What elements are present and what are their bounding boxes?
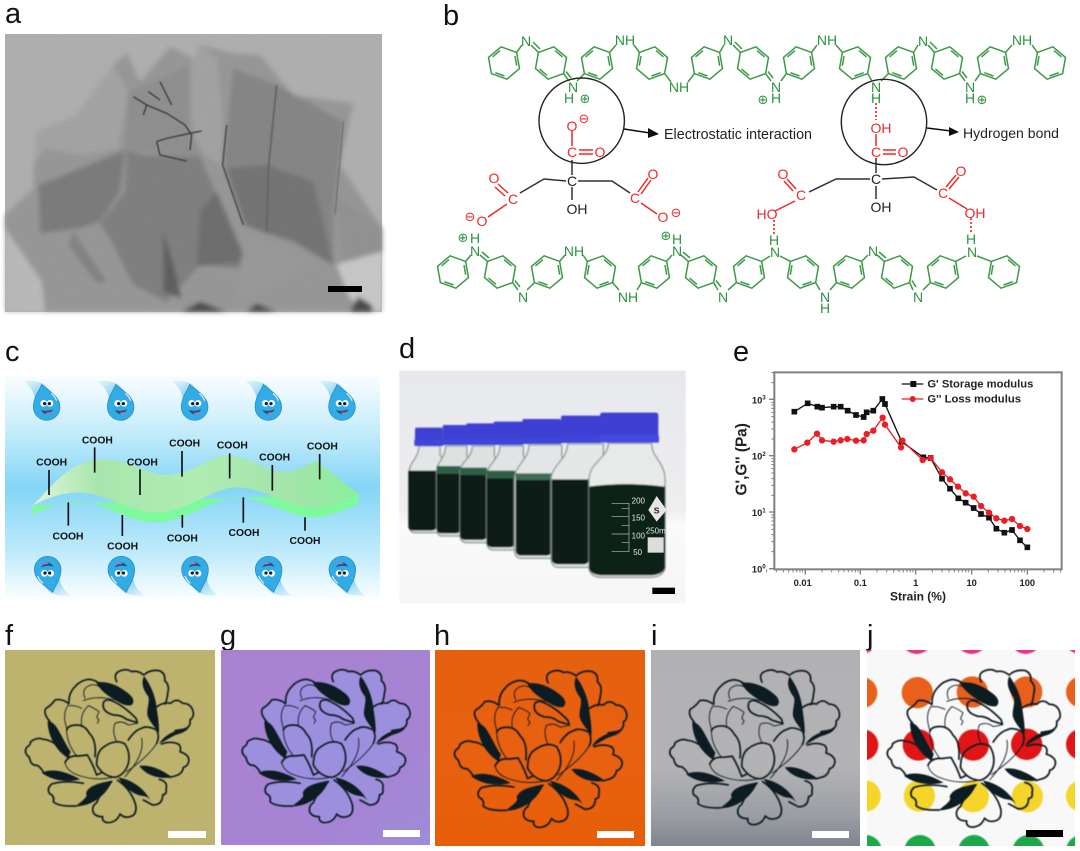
panel a: TEM micrograph of nanosheets (5, 34, 382, 312)
panel label g: g (220, 620, 236, 652)
top polyaniline chain: N (568, 79, 578, 95)
top polyaniline chain: ⊕ (758, 93, 768, 108)
panel label h: h (434, 620, 450, 652)
callout: electrostatic interaction (539, 78, 812, 163)
bottom polyaniline chain: N (770, 244, 780, 260)
x tick labels: 10 (966, 578, 977, 588)
bottle 6 (551, 416, 608, 567)
series: loss modulus (794, 418, 1027, 529)
panel c: hydrated sheet with COOH groups and water droplets (5, 376, 380, 600)
panel g: flower pattern on purple substrate (221, 650, 430, 845)
legend: G'' Loss modulus (927, 393, 1021, 405)
top polyaniline chain: NH (669, 79, 689, 95)
COOH labels: COOH (259, 453, 290, 464)
panel j: flower pattern on white substrate with coloured dots (867, 650, 1075, 846)
bottle markings: S (654, 505, 660, 515)
icon: water droplets, top row (24, 381, 355, 420)
bottom polyaniline chain: N (470, 243, 480, 259)
bottle 2 (437, 425, 470, 536)
left citrate molecule: O (489, 170, 500, 186)
scale bar d (652, 588, 675, 594)
panel label j: j (866, 620, 873, 652)
scale bar j (1026, 830, 1063, 837)
bottle markings: 150 (632, 514, 646, 523)
bottom polyaniline chain: H (672, 231, 682, 247)
COOH labels: COOH (107, 541, 138, 552)
right citric acid molecule with hydrogen bonds: OH (870, 120, 892, 136)
x tick labels: 0.01 (794, 578, 812, 588)
y axis title: G',G'' (Pa) (734, 423, 751, 495)
y tick labels: 0 (762, 565, 766, 571)
bottom polyaniline chain: NH (564, 243, 584, 259)
top polyaniline chain: H (965, 90, 975, 106)
COOH labels: COOH (36, 457, 67, 468)
right citric acid molecule with hydrogen bonds (756, 103, 986, 235)
bottle 5 (514, 419, 565, 558)
bottom polyaniline chain: N (820, 289, 830, 305)
x tick labels: 1 (913, 578, 918, 588)
top polyaniline chain: N (521, 33, 531, 49)
bottle markings (612, 496, 668, 557)
y tick labels (752, 395, 766, 574)
bottom polyaniline chain: NH (618, 289, 638, 305)
left citrate molecule: OH (566, 201, 588, 217)
legend: G' Storage modulus (927, 378, 1033, 390)
top polyaniline chain: ⊕ (977, 93, 987, 108)
top polyaniline chain: H (871, 90, 881, 106)
COOH labels: COOH (307, 442, 338, 453)
y tick labels: 10 (752, 395, 762, 405)
left citrate molecule: ⊖ (465, 210, 475, 225)
bottom polyaniline chain: N (967, 244, 977, 260)
left citrate molecule: O (567, 118, 578, 134)
right citric acid molecule with hydrogen bonds: OH (870, 199, 892, 215)
axes (767, 372, 1062, 575)
left citrate molecule: O (477, 213, 488, 229)
x axis title: Strain (%) (890, 590, 946, 604)
panel label e: e (733, 336, 749, 368)
top polyaniline chain: N (771, 79, 781, 95)
COOH labels: COOH (169, 439, 200, 450)
bottle markings: 50 (633, 548, 643, 557)
right citric acid molecule with hydrogen bonds: OH (964, 205, 986, 221)
top polyaniline chain (488, 32, 1066, 108)
right citric acid molecule with hydrogen bonds: C (796, 187, 806, 203)
bottom polyaniline chain: H (769, 232, 779, 248)
bottle 4 (487, 422, 527, 550)
callout: hydrogen bond (841, 79, 1059, 165)
COOH labels: COOH (167, 533, 198, 544)
bottom polyaniline chain: H (966, 231, 976, 247)
COOH labels: COOH (52, 531, 83, 542)
panel b: polyaniline / citric acid chemistry diagram (438, 32, 1066, 316)
right citric acid molecule with hydrogen bonds: O (898, 144, 909, 160)
bottom polyaniline chain: N (868, 243, 878, 259)
top polyaniline chain: N (723, 32, 733, 48)
left citrate molecule: C (567, 144, 577, 160)
COOH labels (36, 436, 338, 552)
panel d: photograph of seven bottles of dark dispersion (399, 371, 686, 603)
scale bar h (597, 831, 634, 838)
legend (902, 378, 1033, 405)
y tick labels: 2 (762, 452, 766, 458)
y tick labels: 3 (762, 396, 766, 402)
scale bar i (812, 831, 849, 838)
y tick labels: 10 (752, 452, 762, 462)
top polyaniline chain: H (771, 90, 781, 106)
bottom polyaniline chain: N (672, 243, 682, 259)
left citrate molecule: ⊖ (671, 206, 681, 221)
COOH labels: COOH (289, 536, 320, 547)
top polyaniline chain: ⊕ (580, 92, 590, 107)
panel label c: c (5, 336, 20, 368)
panel label d: d (399, 333, 415, 365)
scale bar f (168, 831, 206, 838)
top polyaniline chain: N (918, 33, 928, 49)
icon: water droplets, bottom row (34, 556, 365, 596)
left citrate molecule: O (658, 209, 669, 225)
bottom polyaniline chain: N (518, 289, 528, 305)
bottle markings: 250ml (646, 527, 668, 536)
COOH labels: COOH (82, 436, 113, 447)
scale bar g (383, 830, 420, 837)
panel f: flower pattern on khaki substrate (5, 650, 215, 845)
left citrate molecule: O (648, 166, 659, 182)
bottom polyaniline chain: N (718, 289, 728, 305)
bottle markings: 200 (632, 496, 646, 505)
y tick labels: 10 (752, 564, 762, 574)
callout: hydrogen bond: Hydrogen bond (963, 126, 1059, 142)
panel h: flower pattern on orange substrate (435, 650, 645, 846)
left citrate molecule: C (630, 190, 640, 206)
scale bar a (328, 286, 362, 292)
COOH labels: COOH (228, 528, 259, 539)
bottle 1 (408, 428, 445, 533)
top polyaniline chain: H (564, 90, 574, 106)
bottom polyaniline chain (438, 229, 1020, 316)
callout: electrostatic interaction: Electrostatic interaction (664, 127, 812, 143)
right citric acid molecule with hydrogen bonds: O (778, 166, 789, 182)
left citrate molecule (465, 112, 681, 229)
green sheet (32, 456, 358, 522)
COOH labels: COOH (127, 457, 158, 468)
panel label b: b (443, 0, 459, 32)
bottom polyaniline chain: H (470, 230, 480, 246)
x tick labels: 100 (1020, 578, 1035, 588)
x tick labels: 0.1 (854, 578, 867, 588)
top polyaniline chain: NH (817, 32, 837, 48)
top polyaniline chain: NH (615, 32, 635, 48)
right citric acid molecule with hydrogen bonds: C (871, 144, 881, 160)
right citric acid molecule with hydrogen bonds: C (938, 185, 948, 201)
COOH stems (49, 447, 320, 536)
right citric acid molecule with hydrogen bonds: HO (756, 206, 778, 222)
panel label f: f (5, 620, 14, 652)
y tick labels: 1 (762, 508, 766, 514)
bottle 7 (589, 413, 665, 577)
panel label i: i (651, 620, 657, 652)
bottle markings: 100 (632, 531, 646, 540)
panel i: flower pattern on metallic grey substrate (651, 650, 860, 846)
top polyaniline chain: N (965, 79, 975, 95)
bottom polyaniline chain: N (913, 289, 923, 305)
bottom polyaniline chain: ⊕ (661, 229, 671, 244)
x tick labels (794, 578, 1035, 588)
bottom polyaniline chain: ⊕ (458, 231, 468, 246)
y tick labels: 10 (752, 508, 762, 518)
series: storage modulus (794, 399, 1027, 547)
top polyaniline chain: NH (1012, 32, 1032, 48)
top polyaniline chain: N (871, 79, 881, 95)
right citric acid molecule with hydrogen bonds: O (956, 163, 967, 179)
left citrate molecule: C (508, 191, 518, 207)
left citrate molecule: ⊖ (579, 112, 589, 127)
panel e: rheology chart of G' and G'' vs strain (734, 372, 1062, 604)
bottle 3 (460, 423, 497, 543)
right citric acid molecule with hydrogen bonds: C (871, 171, 881, 187)
left citrate molecule: C (567, 173, 577, 189)
bottom polyaniline chain: H (820, 300, 830, 316)
left citrate molecule: O (595, 144, 606, 160)
COOH labels: COOH (217, 441, 248, 452)
